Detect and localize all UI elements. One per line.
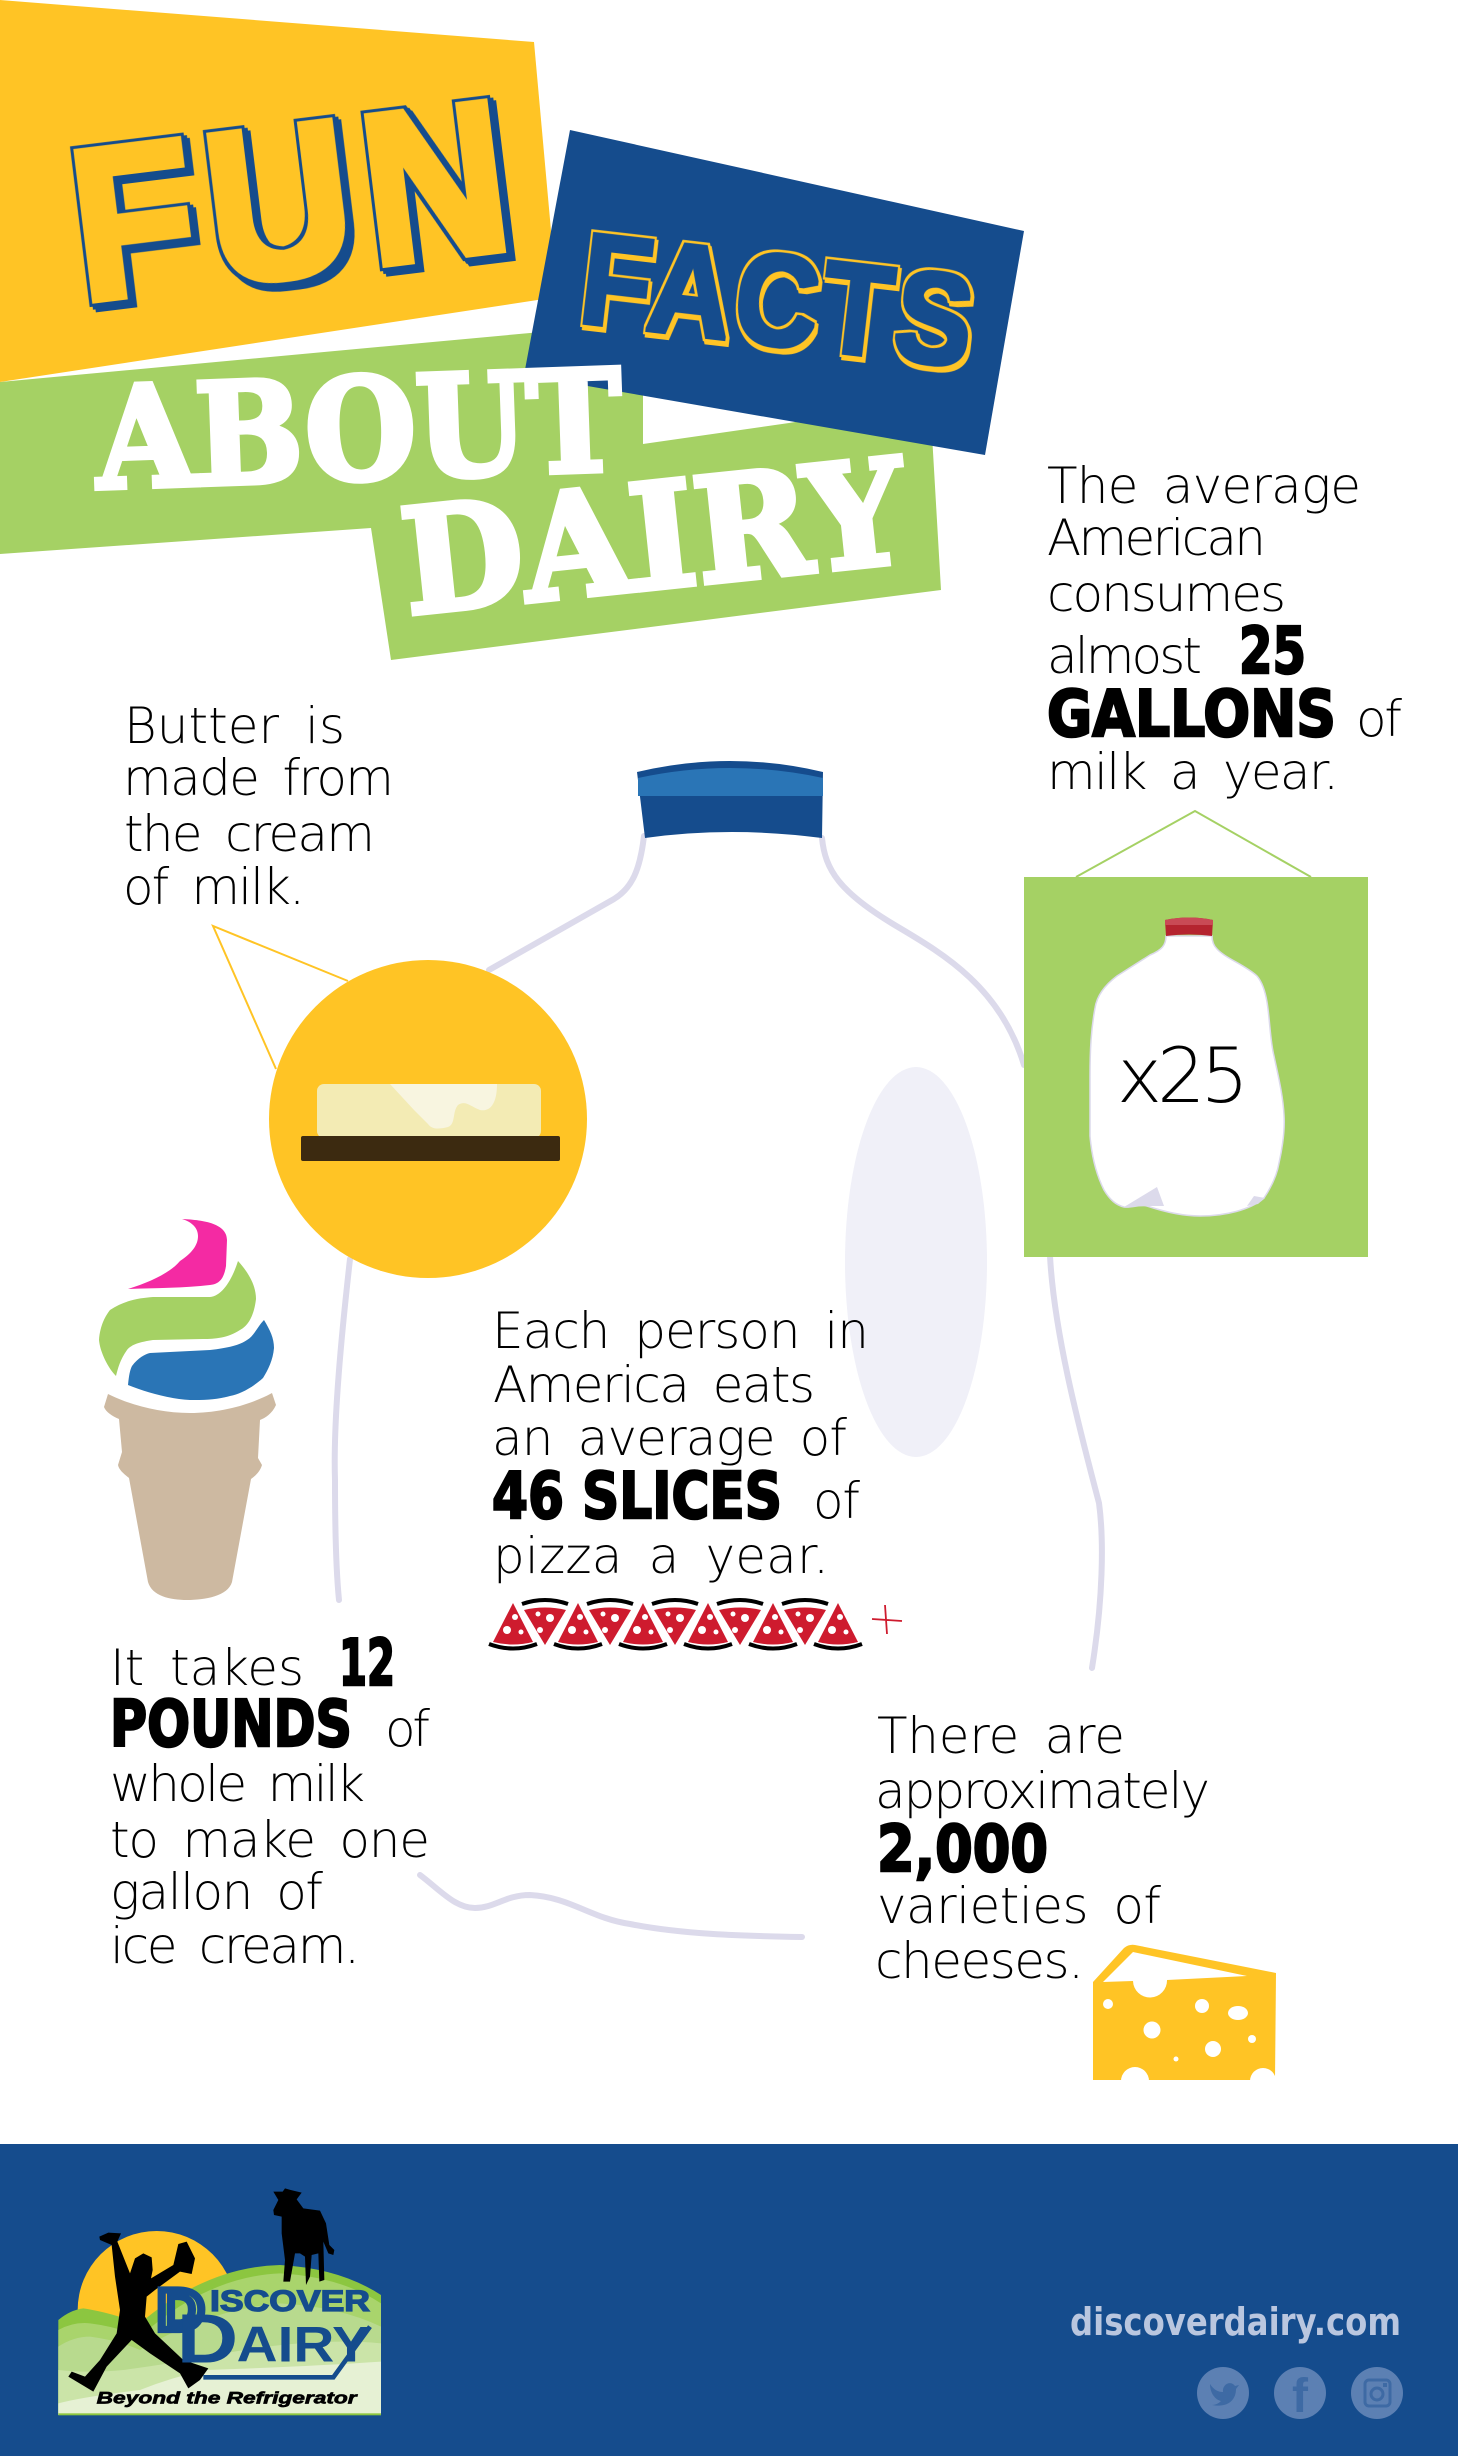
pizza fact text: 46 SLICES [492,1460,782,1534]
icon: facebook [1274,2367,1326,2423]
pizza fact text: Each person in [492,1302,869,1360]
pizza slices row [489,1600,902,1648]
icon: twitter [1197,2367,1249,2419]
jug cap [637,761,823,838]
ice cream fact text [110,1627,430,1975]
pizza fact text [492,1302,869,1585]
title word: FACTS: FACTS [574,205,985,395]
ice cream fact text: It takes [110,1639,304,1697]
ice cream fact text: ice cream. [110,1917,360,1975]
panel: x25 milk gallon: x25 [1117,1031,1249,1120]
milk fact text: The average [1047,457,1361,515]
cheese fact text: 2,000 [877,1813,1048,1887]
icon: instagram [1351,2367,1403,2419]
cheese fact text: cheeses. [875,1932,1084,1990]
cheese icon [1093,1945,1276,2095]
title word: DAIRY: DAIRY [394,426,915,648]
title word: ABOUT: ABOUT [91,338,625,522]
ice cream icon [99,1219,276,1600]
ice cream fact text: whole milk [110,1755,365,1813]
butter fact text: made from [123,749,394,807]
milk fact text: milk a year. [1047,743,1339,801]
milk fact text: American [1047,509,1266,567]
title banner: about dairy green [0,322,941,660]
jug highlight [845,1067,987,1457]
discover dairy logo: Beyond the Refrigerator [97,2388,359,2407]
discover dairy logo: AIRY [237,2317,370,2373]
cheese fact text [875,1707,1210,1990]
cheese fact text: varieties of [877,1877,1161,1935]
milk fact text: of [1356,690,1402,748]
website url: discoverdairy.com [1070,2300,1401,2344]
cheese fact text: approximately [875,1762,1210,1820]
butter callout pointer [213,926,348,1069]
milk fact text: almost [1047,627,1202,685]
ice cream fact text: of [385,1700,430,1758]
milk fact text: 25 [1239,615,1306,689]
ice cream fact text: gallon of [110,1863,323,1921]
butter fact text: the cream [124,805,375,863]
butter fact text: of milk. [123,858,305,916]
milk callout pointer [1076,811,1311,877]
butter icon circle [269,960,587,1278]
title banner: facts blue [524,130,1024,455]
ice cream fact text: 12 [339,1627,395,1701]
butter fact text: Butter is [124,697,345,755]
discover dairy logo: ISCOVER [210,2285,370,2318]
cheese fact text: There are [877,1707,1125,1765]
icon: facebook: f [1292,2370,1309,2423]
pizza fact text: of [813,1472,860,1530]
pizza fact text: America eats [493,1356,815,1414]
butter fact text [123,697,394,916]
milk fact text: GALLONS [1047,678,1336,752]
pizza fact text: an average of [492,1409,847,1467]
discover dairy logo: D [177,2300,238,2378]
title word: FUN: FUN [58,53,534,346]
large milk jug outline [335,836,1102,1937]
discover dairy logo [58,2188,381,2415]
discover dairy logo: D [157,2278,204,2342]
ice cream fact text: to make one [110,1811,430,1869]
pizza fact text: pizza a year. [493,1527,829,1585]
milk fact text [1047,457,1402,801]
footer band [0,2144,1458,2456]
ice cream fact text: POUNDS [110,1688,352,1762]
panel: x25 milk gallon [1024,877,1368,1257]
milk fact text: consumes [1047,565,1286,623]
title banner: fun yellow [0,0,557,382]
